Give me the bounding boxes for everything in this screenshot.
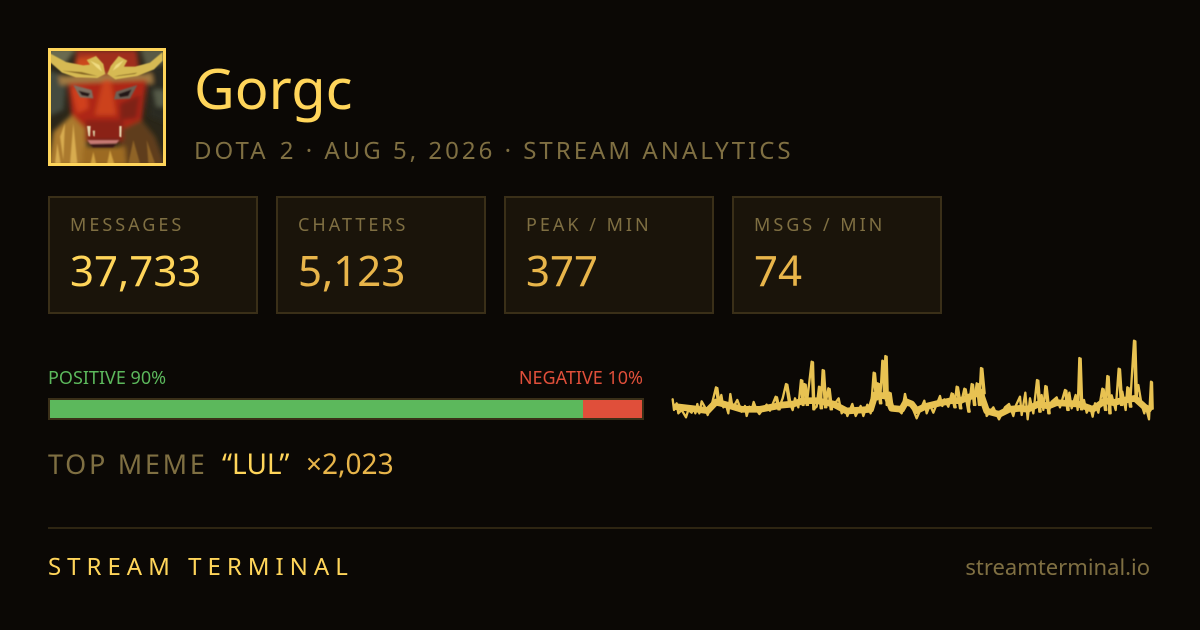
top meme: TOP MEME xyxy=(48,445,208,482)
divider xyxy=(48,527,1152,529)
stat card: messages per minute xyxy=(732,196,942,314)
stat card: messages per minute: MSGS / MIN xyxy=(754,213,885,237)
top meme xyxy=(48,445,394,483)
site url: streamterminal.io xyxy=(965,552,1150,582)
top meme: ×2,023 xyxy=(306,445,394,483)
negative label: NEGATIVE 10% xyxy=(519,366,643,390)
stat card: messages: MESSAGES xyxy=(70,213,184,237)
sentiment bar xyxy=(48,398,644,420)
subtitle: DOTA 2 · AUG 5, 2026 · STREAM ANALYTICS xyxy=(194,134,794,167)
top meme: “LUL” xyxy=(222,445,289,483)
stat card: peak per minute: PEAK / MIN xyxy=(526,213,652,237)
stat card: messages per minute: 74 xyxy=(754,242,802,299)
stat card: chatters: 5,123 xyxy=(298,242,405,299)
avatar: monkey king portrait xyxy=(48,48,166,166)
stat card: messages xyxy=(48,196,258,314)
title: Gorgc xyxy=(194,50,353,126)
stat card: chatters: CHATTERS xyxy=(298,213,408,237)
stat card: chatters xyxy=(276,196,486,314)
brand name: STREAM TERMINAL xyxy=(48,550,354,583)
stat card: messages: 37,733 xyxy=(70,242,201,299)
stat card: peak per minute: 377 xyxy=(526,242,598,299)
positive label: POSITIVE 90% xyxy=(48,366,166,390)
sparkline chart xyxy=(672,340,1154,420)
stat card: peak per minute xyxy=(504,196,714,314)
